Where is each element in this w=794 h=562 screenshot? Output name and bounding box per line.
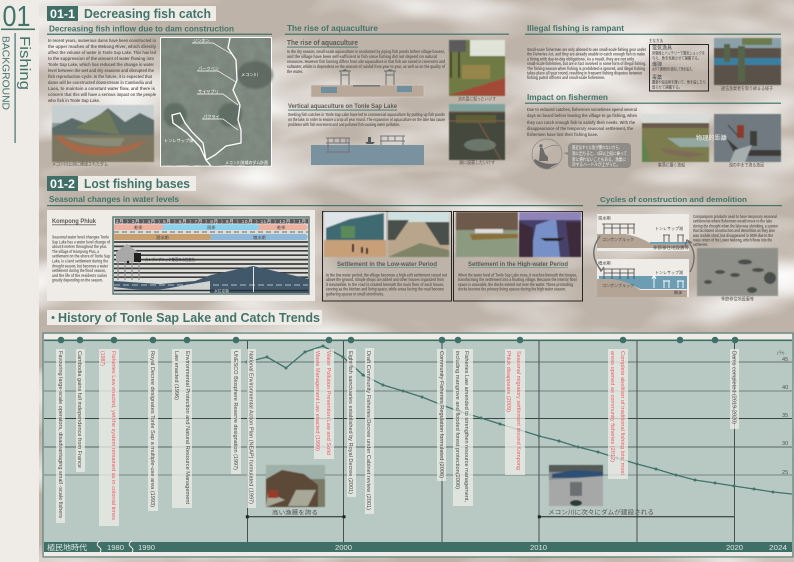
timeline axis with event dots [44, 337, 792, 343]
overlay label: 物理的距離 [696, 134, 727, 142]
caption: 湖に設置したいけす [459, 159, 495, 166]
panel: high-water settlement [454, 212, 582, 301]
illegal fishing text: a living with day-to-day obligations. As a result, they are not only [527, 56, 634, 61]
year axis band: 2000 [335, 543, 352, 552]
subheading: seasonal changes: Seasonal changes in water levels [49, 195, 180, 204]
map: Mekong dams satellite: トンレサップ湖 [164, 137, 193, 144]
box: main illegal methods: 与え、魚を気絶させて捕獲する。 [652, 54, 701, 62]
settlement text: gathering spaces or small storefronts. [326, 292, 384, 296]
dam text block: Laos, to maintain a constant water flow, and there is [48, 86, 155, 91]
place description: and the life of the residents varies [52, 273, 108, 278]
event: seasonal settlement disappears: Phluk disappears (2009) [505, 351, 511, 412]
panel: dam construction [47, 24, 273, 168]
dam text block: affect the volume of water in Tonle Sap Lake. This has led [48, 50, 156, 55]
y axis labels: 25 [782, 470, 788, 476]
dam text block: concern that this will have a serious impact on the people [48, 92, 156, 97]
map: Mekong dams satellite: メコン川 [241, 72, 258, 77]
event: seasonal settlement disappears: Seasonal migratory settlement around Kompong [515, 351, 521, 470]
quote bubble: 家に帰れないこともある。漁業に [572, 156, 626, 163]
year axis band: 1990 [138, 543, 155, 552]
diagram: low water stage: 渇水期 [598, 214, 611, 222]
place description: Seasonal water level changes Tonle [52, 234, 110, 240]
settlement text [326, 272, 447, 296]
panel: Kompong Phluk water levels [47, 210, 315, 301]
box: main illegal methods: 弱らせて捕獲する。 [652, 84, 682, 90]
event: water pollution law: Water Pollution Prevention Law and Solid [325, 351, 331, 455]
arrow: cycle down [594, 236, 604, 271]
dry and wet season bars: 乾季 [134, 224, 143, 231]
heading 01-2: 01-2 [50, 177, 75, 191]
aquaculture text: the water. [287, 69, 303, 74]
panel: low-water settlement [322, 212, 452, 301]
dam text block: level between the wet and dry seasons and disrupted the [48, 68, 154, 73]
dam text block: who fish in Tonle Sap Lake. [47, 98, 100, 103]
event: fisheries law amended: including mangrove and flooded forest protection(2006) [454, 351, 460, 489]
caption: dams built: メコン川に次々にダムが建設される [548, 508, 654, 516]
box: main illegal methods: 農薬や殺虫剤を撒いて、魚を殺したり [652, 78, 706, 86]
dam text block: In recent years, numerous dams have been constructed in [48, 38, 156, 43]
caption: 湖の中まで漁る漁民 [729, 162, 764, 168]
impact text [527, 107, 637, 137]
subheading: Decreasing fish inflow due to dam construction [49, 24, 234, 34]
low and high water bars [114, 234, 308, 241]
event: fishing lots abolished: areas opened as community fisheries (2012) [609, 351, 615, 462]
place description: Sap Lake has a water level change of [52, 239, 110, 244]
river [172, 38, 241, 166]
panel: cycles of construction and demolition [594, 195, 782, 302]
event: seasonal settlement disappears [505, 349, 525, 475]
event: independence [76, 349, 85, 472]
event: large-scale operators: Favouring large-scale operators, disadvantaging small -scale fishers [57, 351, 63, 518]
quote bubble: 対するハードルが上がった。 [572, 161, 620, 168]
dry and wet season bars: 乾季 [277, 224, 286, 231]
photo: dam [549, 465, 603, 506]
chart: catch line [246, 344, 792, 494]
box: main illegal methods: 発電機とバッテリーで電気ショックを [652, 50, 705, 56]
panel: history timeline and catch chart [43, 333, 793, 557]
panel: illegal fishing [525, 24, 781, 92]
chart: seasonal water level [113, 217, 309, 294]
settlement text [458, 272, 577, 292]
photo: patrol arrests [714, 38, 781, 85]
y axis labels: 30 [782, 441, 788, 447]
dam text block: to the suppression of the amount of water flowing into [48, 56, 154, 61]
event: community fisheries decree [365, 348, 374, 514]
y axis labels: 40 [782, 385, 788, 391]
year axis band: 2024 [769, 543, 787, 552]
diagram: ponds by stilt houses [311, 69, 424, 97]
diagram: low water stage [597, 214, 689, 251]
diagram: low water stage: コンポンプルック [602, 236, 634, 243]
sidebar: section marker [0, 0, 39, 562]
water depth arrow [252, 267, 254, 292]
event: fisheries law 1987: (1987) [99, 351, 105, 366]
panel: impact on fishermen [525, 93, 781, 169]
event: environmental law [172, 349, 192, 508]
icon: fisherman in circle [532, 139, 562, 169]
caption: 集落に置く漁船 [658, 162, 685, 168]
aquaculture text [287, 49, 445, 74]
caption: high catches: 高い漁獲を誇る [272, 508, 318, 516]
box: main illegal methods: 毒薬 [652, 74, 662, 81]
illegal fishing text [527, 47, 646, 80]
settlement text: When the water level of Tonle Sap Lake rises, it reaches beneath the houses, [458, 272, 577, 278]
heading: history timeline: ・ [47, 311, 59, 325]
place description [52, 234, 110, 283]
event: fishing lots abolished [608, 349, 628, 479]
photo: boats in flooded village [456, 212, 518, 257]
section number: 01 [2, 1, 30, 33]
quote bubble: 最近はすぐに魚が獲れないから、 [572, 144, 622, 151]
settlement text: transforming the settlement into a floating village. Because the interior floor [458, 277, 577, 282]
photo: dry riverbed [388, 212, 449, 257]
illegal fishing text: small-scale fishermen, but are in fact involved in some form of illegal fishing. [527, 61, 646, 66]
dry and wet season bars: 雨季 [207, 224, 216, 231]
event: independence: Cambodia gains full independence from France [76, 351, 82, 468]
event: environmental law: Law enacted (1996) [173, 351, 179, 400]
map: Mekong dams satellite: ジンホン [193, 38, 210, 43]
y axis labels: 45 [782, 357, 788, 363]
dam text block: the upper reaches of the Mekong River, which directly [48, 44, 156, 49]
settlement text: it meanwhile. In the road is created beneath the main floor of each house, [326, 282, 444, 287]
subheading: Settlement in the Low-water Period [337, 261, 437, 268]
box: main illegal methods [649, 37, 708, 91]
photo: Mekong dam [52, 105, 154, 162]
cycles text: settlement. [693, 242, 708, 247]
event: fisheries law amended: Fisheries Law amended to strengthen resource management, [463, 351, 469, 502]
subheading: Settlement in the High-water Period [468, 261, 568, 268]
vertical aquaculture text: problems with fish excrement and and polluted fish causing water pollution. [288, 122, 400, 127]
impact text: they can catch enough fish to satisfy their needs. With the [527, 120, 635, 125]
heading 01-1: Decreasing fish catch [84, 7, 211, 21]
place name: Kompong Phluk [52, 219, 97, 225]
event: fish sanctuaries: Eight fish sanctuaries established by Royal Decree (2001) [347, 351, 353, 494]
photo: lake pen [449, 104, 505, 160]
event: dams completed [730, 349, 739, 429]
impact text: days on board before leaving the village to go fishing, when [527, 113, 637, 118]
illegal fishing text: The fishing season when fishing is prohibited is ignored, and illegal fishing [527, 66, 645, 71]
subheading: vertical aquaculture: Vertical aquaculture on Tonle Sap Lake [288, 103, 397, 110]
event: UNESCO: UNESCO Biosphere Reserve designation (1997) [232, 351, 238, 470]
cycles text [692, 214, 778, 247]
event: fish sanctuaries [347, 349, 356, 497]
dam text block: fish reproduction cycle. In the future, it is expected that [48, 74, 152, 79]
event: UNESCO [231, 349, 241, 474]
event: community fisheries regulation: Community Fisheries Regulation formulated (2006) [438, 351, 444, 478]
place description: about 8 metres throughout the year. [52, 244, 107, 249]
event: large-scale operators [56, 349, 65, 523]
vertical aquaculture text: on the lake. In order to ensure a crop all year round. The expansion of aquaculture on the lake has cause [288, 117, 445, 122]
period bracket: dam building [538, 515, 734, 518]
caption: 季節移住地設置等 [721, 296, 754, 302]
year axis band: 植民地時代 [47, 542, 87, 552]
event: NEAP: National Environmental Action Plan (NEAP) formulated (1997) [248, 351, 254, 504]
box: main illegal methods: 爆弾 [652, 61, 662, 68]
vertical aquaculture text: Seeking fish catches in Tonle Sap Lake have led to commercial aquaculture by putting up fish ponds [288, 112, 445, 117]
photo: floating village at dusk [519, 212, 581, 257]
settlement text: In the low water period, the village becomes a high-stilt settlement raised out [326, 272, 447, 278]
diagram: low water stage: 季節移住地設置等 [653, 244, 689, 251]
heading: history timeline: History of Tonle Sap Lake and Catch Trends [58, 311, 320, 325]
low and high water bars: 増水期 [253, 234, 266, 241]
water level curve [114, 266, 309, 293]
box: main illegal methods: 主な方法 [649, 37, 664, 44]
diagram: high water stage: 解体 [674, 289, 683, 296]
period bracket: high catches [246, 515, 346, 518]
panel: rise of aquaculture [285, 24, 509, 166]
impact text: disappearance of the temporary seasonal settlement, the [527, 126, 633, 131]
heading: Impact on fishermen [527, 93, 608, 102]
dam text block: Tonle Sap Lake, which has reduced the change in water [48, 62, 154, 67]
map: Mekong dams satellite [160, 38, 273, 166]
year axis band [44, 541, 792, 553]
photo: pond [449, 40, 505, 96]
diagram: high water stage [597, 259, 689, 297]
grid lines [44, 361, 792, 363]
quote bubble: 漁に出ちると、3日以上船に乗って [572, 150, 627, 157]
event: fishing lots abolished: Complete abolition of traditional fishing lots; most [619, 351, 625, 475]
aquaculture text: saltwater, whilst is dependent on the amount of rainfall from year to year, as well as on the quality of [287, 64, 445, 69]
place description: Lake, is a land settlement during the [52, 258, 109, 264]
map: Mekong dams satellite: パークベン [198, 66, 219, 72]
y axis labels: 35 [782, 413, 788, 419]
event: water pollution law: Waste Management Law enacted (1999) [314, 351, 320, 451]
illegal fishing text: Small-scale fishermen are only allowed to use small-scale fishing gear under [527, 47, 646, 52]
box: main illegal methods: 電気漁具 [652, 44, 672, 52]
photo: moored boats [642, 114, 709, 162]
dry and wet season bars [114, 224, 308, 231]
photo: stilt village street [324, 212, 386, 257]
diagram: lake fish pens [311, 136, 424, 165]
heading 01-2: Lost fishing bases [84, 177, 190, 191]
heading 01-1: 01-1 [50, 7, 75, 21]
dam text block: dams will be constructed downstream in Cambodia and [48, 80, 152, 85]
stilt house [116, 244, 141, 280]
event: fisheries law 1987: Fisheries Law enacted, yet the system remained as in colonial times [110, 351, 116, 520]
map: Mekong dams satellite: メコン川流域のダム計画 [225, 159, 268, 166]
event: dams completed: Dams completed (2019-2020) [730, 351, 736, 424]
map: Mekong dams satellite: サイヤブリ [198, 88, 219, 95]
settlement text: docks become the primary living spaces during the high water season. [458, 287, 566, 292]
vertical aquaculture text [288, 112, 445, 127]
heading: Illegal fishing is rampant [527, 24, 624, 33]
settlement text: space is unusable, the docks extend out over the water. These protruding [458, 282, 573, 287]
arrow: cycle up [685, 240, 694, 272]
event: water pollution law [314, 349, 334, 459]
heading 01-2 [47, 176, 196, 191]
sidebar title: Fishing [16, 36, 33, 90]
place description: drought season, but becomes a water [52, 263, 108, 268]
diagram: low water stage: トンレサップ湖 [655, 225, 683, 232]
caption: 池の畳に掘ったいけす [458, 96, 496, 102]
illegal fishing text: fishing patrol officers and small-scale fishermen. [527, 75, 605, 80]
subheading: The rise of aquaculture [287, 40, 358, 47]
photo: fishers with catch [266, 465, 325, 507]
month arrows: 2月 〉3月 〉4月 〉5月 〉6月 〉7月 〉8月 〉9月 〉10月 〉11月 〉12月 〉1月 [116, 219, 306, 225]
chart: seasonal water level: 水位変動 [214, 288, 229, 294]
event: fisheries law amended [453, 349, 473, 506]
quote bubble [563, 143, 631, 168]
settlement text: above the ground. Simple shops are added and other houses organized from [326, 277, 444, 282]
photo: seasonal settlement [697, 248, 778, 296]
place description: The village of Kompong Pluc, a [52, 249, 100, 254]
year axis band: 2010 [530, 543, 547, 552]
diagram: high water stage: 増水期 [598, 260, 611, 266]
aquaculture text: and the village have been self-sufficient in fish since fishing did not depend on natural [287, 54, 437, 59]
y axis labels [777, 350, 788, 476]
event: environmental law: Environmental Protection and Natural Resource Management [184, 351, 190, 504]
box: main illegal methods: 水中で爆発物を使用して魚を殺す。 [652, 66, 694, 72]
place description: settlement on the shore of Tonle Sap [52, 254, 110, 259]
photo: fishing on lake [714, 114, 781, 162]
settlement text: serving as the kitchen and living space, while areas facing the road become [326, 287, 444, 292]
place description: settlement during the flood season, [52, 268, 106, 273]
year axis band: 2020 [726, 543, 743, 552]
map: Mekong dams satellite: パクライ [203, 114, 220, 120]
event: NEAP [247, 349, 256, 508]
impact text: fishermen have lost their fishing base. [527, 132, 598, 137]
impact text: Due to reduced catches, fishermen sometimes spend several [527, 107, 637, 112]
event: community fisheries decree: Draft Community Fisheries Decree under Cabinet review (2001) [365, 351, 371, 510]
event: royal decree [148, 349, 158, 511]
stripe field [114, 242, 308, 277]
diagram: high water stage: トンレサップ湖 [655, 269, 683, 276]
caption: 違法漁業者を取り締まる様子 [721, 85, 773, 92]
event: royal decree: Royal Decree designates Tonle Sap a multiple-use area (1993) [149, 351, 155, 507]
chart: seasonal water level: カンポンプルック集落の水位変化 [145, 257, 195, 262]
aquaculture text: resources. However fish farming differs from site aquaculture in that fish are raised in reservoirs and [287, 59, 445, 64]
year axis band: 1980 [107, 543, 124, 552]
diagram: high water stage: コンポンプルック [602, 282, 634, 289]
event: fisheries law 1987 [99, 349, 119, 526]
place description: greatly depending on the season. [52, 278, 103, 283]
heading: The rise of aquaculture [287, 24, 379, 33]
event: community fisheries regulation [437, 349, 446, 481]
low and high water bars: 渇水期 [156, 234, 169, 241]
y axis labels: (千t) [777, 350, 785, 355]
dam leader lines [192, 43, 238, 130]
dam text block [47, 38, 156, 103]
heading: Cycles of construction and demolition [600, 195, 747, 204]
aquaculture text: In the dry season, small-scale aquaculture is conducted by piping fish ponds before village houses, [287, 49, 445, 54]
illegal fishing text: takes place all year round, resulting in frequent fishing disputes between [527, 70, 642, 76]
photo caption: メコン川上流に建設されたダム [52, 160, 108, 168]
illegal fishing text: the Fisheries Act, and they are already unable to catch enough fish to make [527, 52, 645, 57]
